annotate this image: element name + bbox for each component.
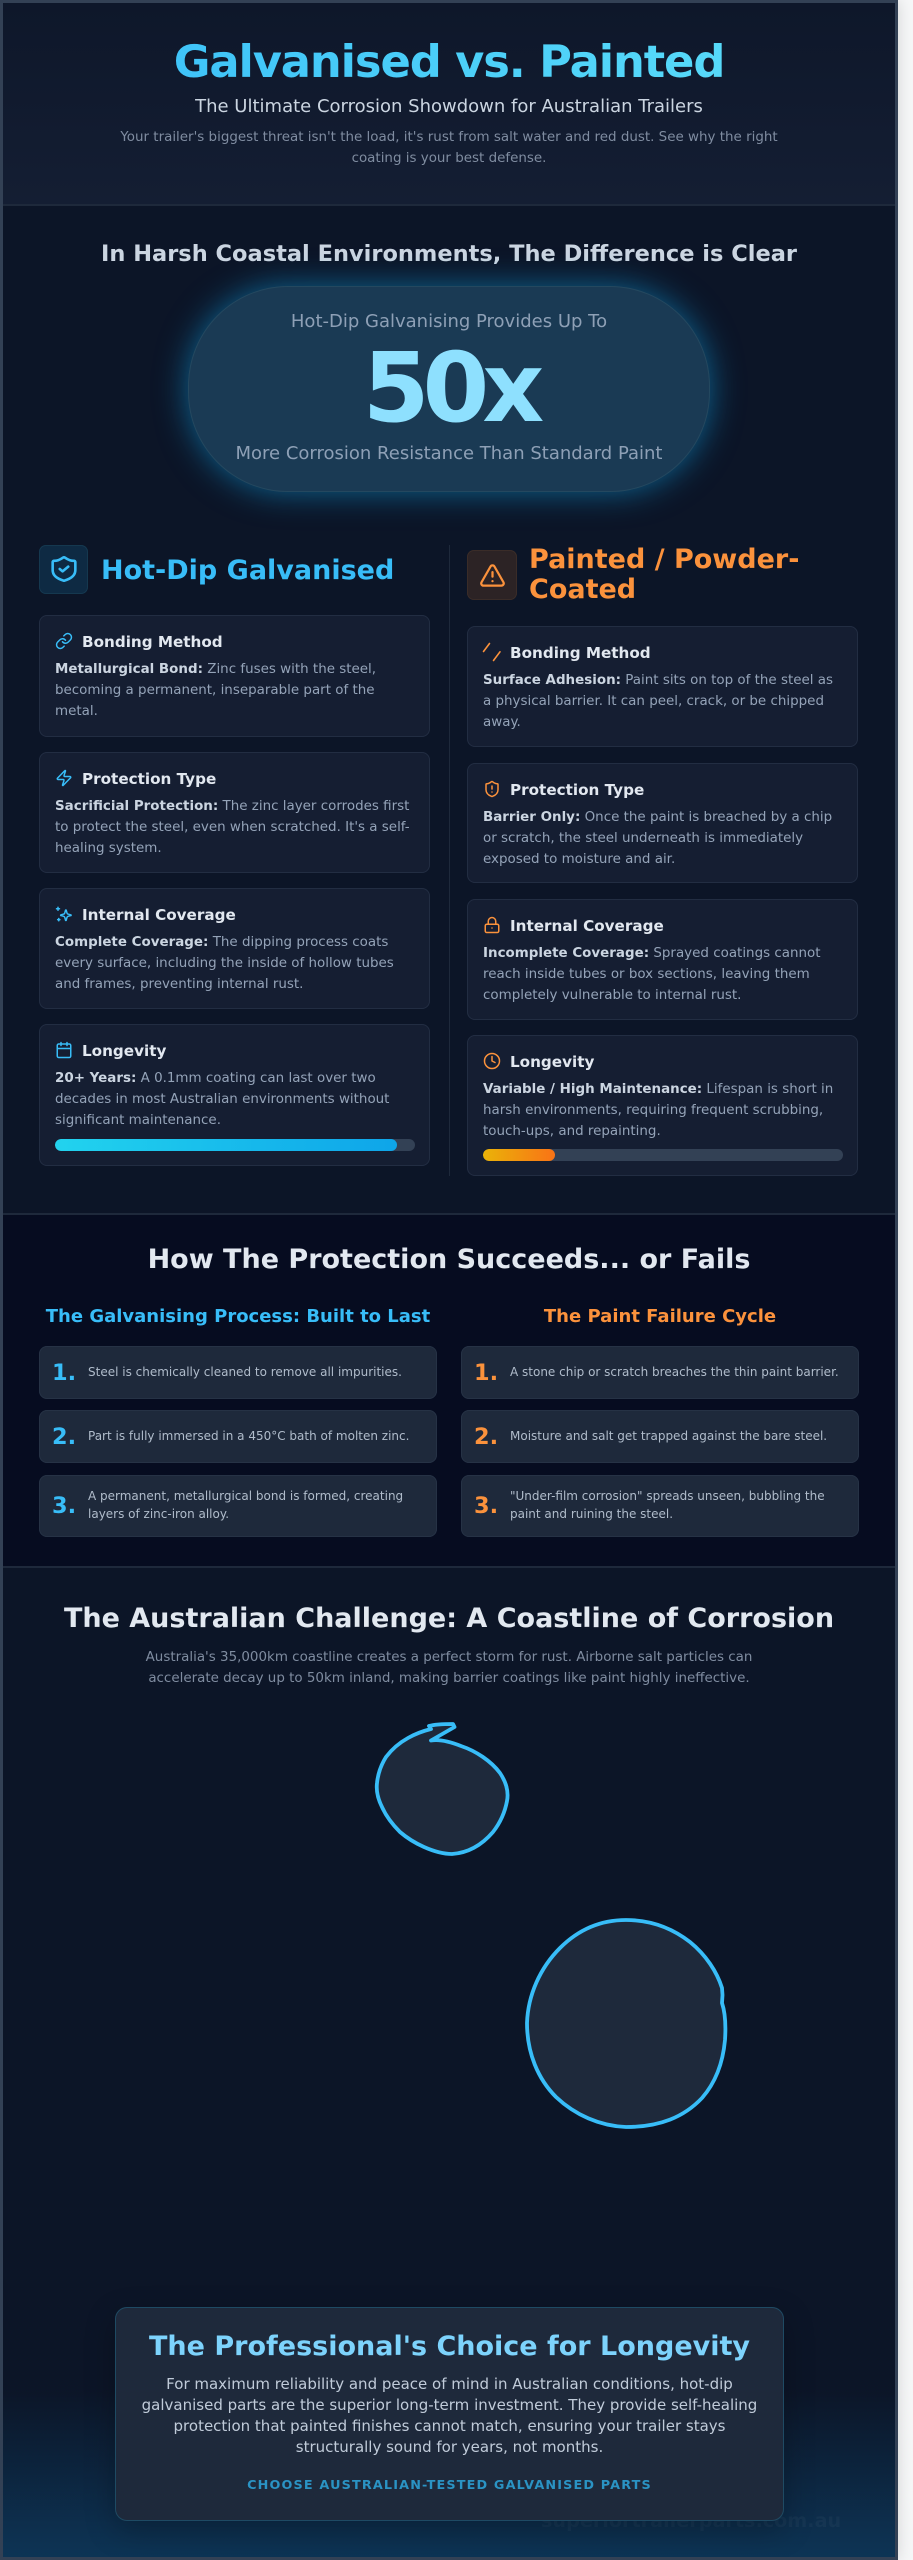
- step text: [88, 1489, 403, 1521]
- card text: Metallurgical Bond: Zinc fuses with the steel,: [55, 662, 376, 677]
- conclusion text: For maximum reliability and peace of mind in Australian conditions, hot-dip: [166, 2375, 733, 2393]
- conclusion text: galvanised parts are the superior long-term investment. They provide self-healing: [142, 2396, 757, 2414]
- heading: harsh coastal environments: In Harsh Coastal Environments, The Difference is Clear: [101, 241, 797, 267]
- section divider: [3, 1566, 895, 1568]
- heading: The Australian Challenge: A Coastline of Corrosion: [64, 1603, 834, 1634]
- panel: painted / powder-coated: [467, 544, 858, 1176]
- step text: A permanent, metallurgical bond is formed, creating: [88, 1489, 403, 1503]
- step number: 1.: [52, 1360, 76, 1386]
- icon: sparkles: [56, 906, 72, 922]
- intro text: coating is your best defense.: [352, 151, 546, 166]
- card text: to protect the steel, even when scratched. It's a self-: [55, 820, 410, 835]
- card title: Longevity: [510, 1053, 594, 1071]
- step 1: [39, 1346, 437, 1399]
- conclusion text: [142, 2375, 757, 2456]
- card text: [483, 1082, 833, 1139]
- progress bar 20%: [483, 1149, 843, 1161]
- icon: broken link: [482, 642, 501, 662]
- card text: [55, 935, 394, 992]
- panel: hot-dip galvanised: [39, 545, 430, 1166]
- icon: calendar: [56, 1042, 72, 1058]
- card text: [55, 799, 410, 856]
- map of australia shapes: [374, 1722, 728, 2129]
- column heading: [529, 544, 799, 605]
- subtitle: The Ultimate Corrosion Showdown for Australian Trailers: [195, 96, 703, 117]
- step 3: [39, 1475, 437, 1537]
- card text: away.: [483, 715, 521, 730]
- card text: Barrier Only: Once the paint is breached by a chip: [483, 810, 832, 825]
- map shape: northern blob: [377, 1724, 508, 1854]
- conclusion text: structurally sound for years, not months.: [296, 2438, 603, 2456]
- card text: healing system.: [55, 841, 162, 856]
- card text: Incomplete Coverage: Sprayed coatings cannot: [483, 946, 821, 961]
- step number: 3.: [474, 1493, 498, 1519]
- card text: significant maintenance.: [55, 1113, 221, 1128]
- card text: becoming a permanent, inseparable part of the: [55, 683, 375, 698]
- column heading: Hot-Dip Galvanised: [101, 555, 394, 586]
- heading: How The Protection Succeeds... or Fails: [148, 1244, 750, 1275]
- callout: 50x pill: [188, 286, 710, 492]
- section divider: [3, 1213, 895, 1215]
- card text: Variable / High Maintenance: Lifespan is short in: [483, 1082, 833, 1097]
- description: [146, 1650, 752, 1686]
- step text: Moisture and salt get trapped against the bare steel.: [510, 1429, 827, 1443]
- step text: Part is fully immersed in a 450°C bath of molten zinc.: [88, 1429, 409, 1443]
- card text: completely vulnerable to internal rust.: [483, 988, 741, 1003]
- step 2: [39, 1410, 437, 1463]
- description: Australia's 35,000km coastline creates a perfect storm for rust. Airborne salt particles can: [146, 1650, 752, 1665]
- step text: layers of zinc-iron alloy.: [88, 1507, 229, 1521]
- step number: 3.: [52, 1493, 76, 1519]
- watermark: superiortrailerparts.com.au: [541, 2509, 841, 2532]
- card title: Longevity: [82, 1042, 166, 1060]
- conclusion heading: The Professional's Choice for Longevity: [149, 2331, 750, 2362]
- card text: exposed to moisture and air.: [483, 852, 675, 867]
- step text: A stone chip or scratch breaches the thin paint barrier.: [510, 1365, 839, 1379]
- card text: Sacrificial Protection: The zinc layer corrodes first: [55, 799, 409, 814]
- card title: Bonding Method: [510, 644, 651, 662]
- description: accelerate decay up to 50km inland, making barrier coatings like paint highly ineffective.: [148, 1671, 750, 1686]
- section: difference and comparison: [3, 206, 895, 1213]
- card text: Complete Coverage: The dipping process coats: [55, 935, 388, 950]
- icon: shield check: [39, 545, 88, 594]
- section: how the protection succeeds or fails: [3, 1215, 895, 1566]
- card: longevity: [467, 1035, 858, 1176]
- step text: paint and ruining the steel.: [510, 1507, 673, 1521]
- step 3: [461, 1475, 859, 1537]
- card text: [55, 662, 376, 719]
- card text: [483, 673, 833, 730]
- card title: Protection Type: [82, 770, 216, 788]
- card title: Internal Coverage: [510, 917, 664, 935]
- intro text: Your trailer's biggest threat isn't the load, it's rust from salt water and red dust. See why the right: [120, 130, 778, 145]
- icon: link: [56, 632, 72, 650]
- title: Galvanised vs. Painted: [174, 35, 724, 88]
- icon: zap: [56, 770, 72, 786]
- card text: and frames, preventing internal rust.: [55, 977, 303, 992]
- card text: [483, 946, 821, 1003]
- card text: 20+ Years: A 0.1mm coating can last over two: [55, 1071, 376, 1086]
- card text: every surface, including the inside of hollow tubes: [55, 956, 394, 971]
- card text: reach inside tubes or box sections, leaving them: [483, 967, 810, 982]
- card text: [483, 810, 832, 867]
- step number: 2.: [474, 1424, 498, 1450]
- card text: Surface Adhesion: Paint sits on top of the steel as: [483, 673, 833, 688]
- card: internal coverage: [39, 888, 430, 1009]
- card text: metal.: [55, 704, 98, 719]
- icon: lock: [484, 916, 500, 934]
- card: longevity: [39, 1024, 430, 1166]
- step 2: [461, 1410, 859, 1463]
- card: internal coverage: [467, 899, 858, 1020]
- card: protection type: [39, 752, 430, 873]
- call to action: CHOOSE AUSTRALIAN-TESTED GALVANISED PARTS: [247, 2478, 652, 2493]
- card title: Internal Coverage: [82, 906, 236, 924]
- conclusion text: protection that painted finishes cannot match, ensuring your trailer stays: [174, 2417, 725, 2435]
- callout lead text: Hot-Dip Galvanising Provides Up To: [291, 311, 607, 332]
- card text: [55, 1071, 390, 1128]
- icon: warning triangle: [467, 550, 517, 600]
- card text: touch-ups, and repainting.: [483, 1124, 661, 1139]
- card text: harsh environments, requiring frequent scrubbing,: [483, 1103, 823, 1118]
- section divider: [3, 204, 895, 206]
- step text: [510, 1489, 825, 1521]
- card text: or scratch, the steel underneath is immediately: [483, 831, 803, 846]
- header section: [3, 3, 895, 204]
- callout trailing text: More Corrosion Resistance Than Standard Paint: [236, 443, 662, 464]
- intro text: [120, 130, 778, 166]
- card title: Bonding Method: [82, 633, 223, 651]
- column divider: [449, 545, 450, 1176]
- step number: 1.: [474, 1360, 498, 1386]
- process heading: The Galvanising Process: Built to Last: [46, 1306, 430, 1327]
- conclusion panel: [115, 2307, 784, 2521]
- column heading: Painted / Powder-: [529, 544, 799, 575]
- process: paint failure: [461, 1306, 859, 1537]
- card: bonding method: [467, 626, 858, 747]
- card: protection type: [467, 763, 858, 883]
- card: bonding method: [39, 615, 430, 737]
- process: galvanising: [39, 1306, 437, 1537]
- progress bar 95%: [55, 1139, 415, 1151]
- column heading: Coated: [529, 574, 636, 605]
- icon: clock: [484, 1052, 500, 1070]
- card text: a physical barrier. It can peel, crack, or be chipped: [483, 694, 824, 709]
- card title: Protection Type: [510, 781, 644, 799]
- icon: shield alert: [485, 780, 499, 798]
- section: the australian challenge: [3, 1568, 895, 2557]
- step text: "Under-film corrosion" spreads unseen, bubbling the: [510, 1489, 825, 1503]
- card text: decades in most Australian environments without: [55, 1092, 389, 1107]
- title: [3, 30, 895, 94]
- step number: 2.: [52, 1424, 76, 1450]
- step 1: [461, 1346, 859, 1399]
- process heading: The Paint Failure Cycle: [544, 1306, 776, 1327]
- big number 50x: 50x: [363, 332, 537, 444]
- map shape: southern blob: [527, 1920, 725, 2127]
- step text: Steel is chemically cleaned to remove all impurities.: [88, 1365, 402, 1379]
